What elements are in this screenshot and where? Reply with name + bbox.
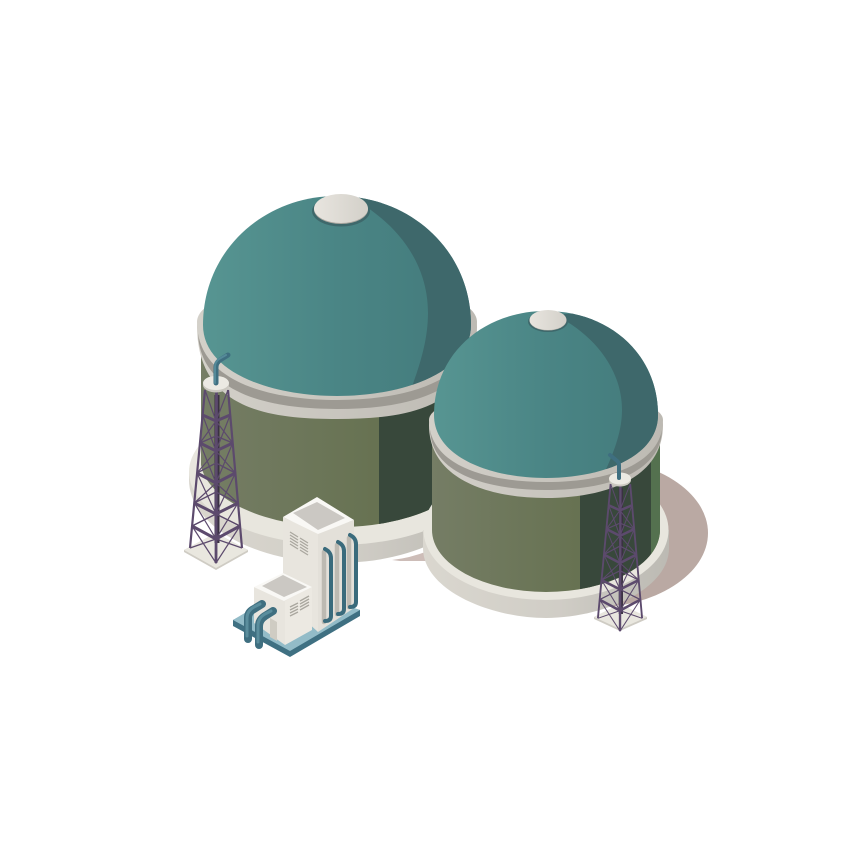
left lattice tower bbox=[184, 355, 248, 570]
tower vent pipe bbox=[215, 355, 228, 383]
right lattice tower bbox=[594, 455, 647, 631]
large tank rim bbox=[197, 280, 477, 419]
equipment base plate bbox=[233, 586, 360, 657]
small tank wall bbox=[432, 444, 660, 592]
tower platform bbox=[609, 472, 631, 486]
large dome cap bbox=[312, 194, 370, 226]
small tank base ring bbox=[423, 460, 669, 618]
small tank dome bbox=[434, 305, 670, 480]
tower base plate bbox=[184, 533, 248, 570]
large tank base ring bbox=[189, 397, 485, 563]
small tank bbox=[423, 305, 670, 618]
vertical pipes on tall cabinet bbox=[324, 535, 356, 622]
front pipes on base bbox=[247, 604, 273, 645]
shadow on ground beside large tank bbox=[392, 551, 428, 561]
small cabinet vents bbox=[290, 596, 309, 616]
small dome cap bbox=[528, 310, 568, 332]
large tank dome bbox=[203, 190, 480, 400]
tower vent pipe bbox=[610, 455, 619, 478]
tower base plate bbox=[594, 604, 647, 631]
tower lattice bbox=[190, 390, 242, 563]
tall cabinet vents bbox=[290, 532, 308, 555]
illustration: gas storage tanks bbox=[184, 194, 708, 657]
small cabinet bbox=[254, 573, 312, 645]
ground shadow of the small tank bbox=[472, 458, 708, 608]
tower platform bbox=[203, 376, 229, 392]
small tank rim bbox=[429, 390, 663, 498]
tower lattice bbox=[598, 484, 642, 631]
tall cabinet bbox=[283, 497, 354, 632]
large tank wall bbox=[201, 356, 435, 527]
large tank bbox=[189, 190, 485, 563]
pump equipment unit bbox=[233, 497, 360, 657]
